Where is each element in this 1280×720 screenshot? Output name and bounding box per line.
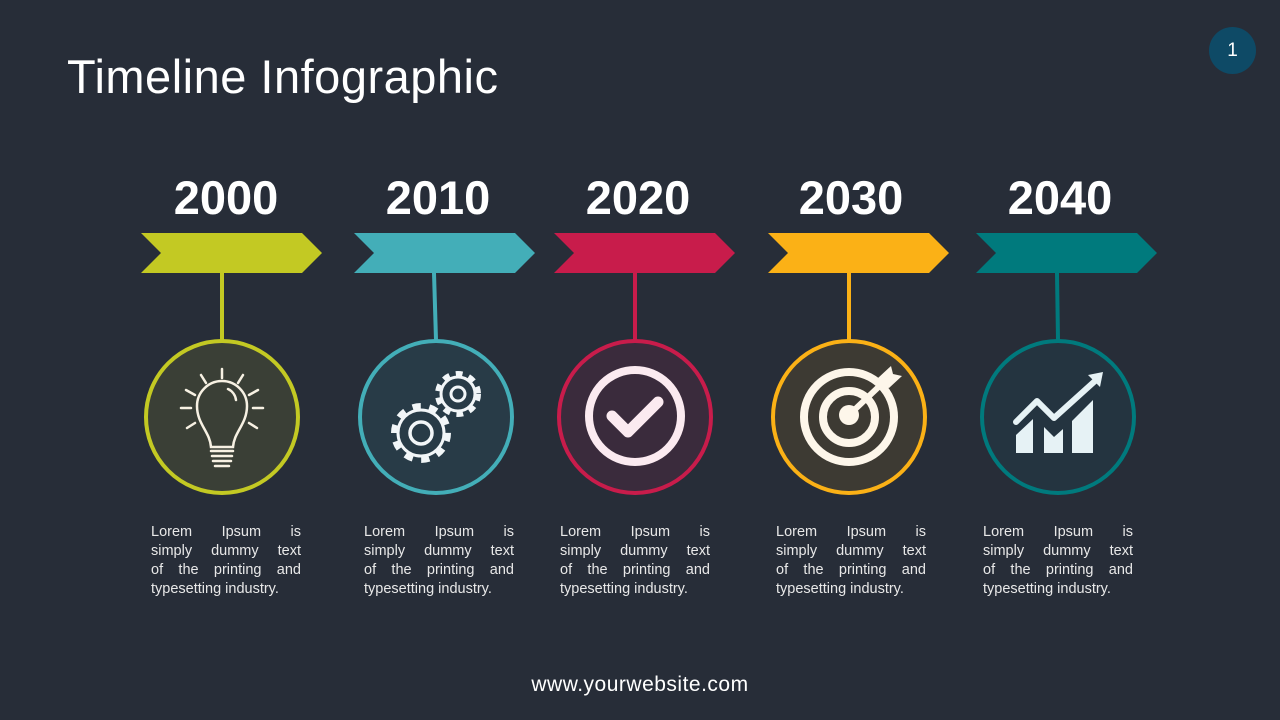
year 2000: 2000 [174, 171, 278, 224]
year 2030: 2030 [799, 171, 903, 224]
text 2010: of the printing and [364, 562, 514, 578]
text 2010: typesetting industry. [364, 581, 492, 597]
text 2000: Lorem Ipsum is [151, 524, 301, 540]
text 2020 [560, 524, 710, 597]
year 2010: 2010 [386, 171, 490, 224]
page number badge [1209, 27, 1256, 74]
footer website: www.yourwebsite.com [531, 673, 749, 696]
title: Timeline Infographic [67, 50, 498, 103]
text 2030 [776, 524, 926, 597]
text 2040: simply dummy text [983, 543, 1133, 559]
text 2000: simply dummy text [151, 543, 301, 559]
text 2010 [364, 524, 514, 597]
page number badge: 1 [1227, 40, 1238, 61]
text 2020: typesetting industry. [560, 581, 688, 597]
text 2000: of the printing and [151, 562, 301, 578]
text 2030: Lorem Ipsum is [776, 524, 926, 540]
text 2000: typesetting industry. [151, 581, 279, 597]
text 2020: Lorem Ipsum is [560, 524, 710, 540]
text 2040 [983, 524, 1133, 597]
text 2010: simply dummy text [364, 543, 514, 559]
text 2030: simply dummy text [776, 543, 926, 559]
year 2020: 2020 [586, 171, 690, 224]
text 2020: simply dummy text [560, 543, 710, 559]
text 2040: of the printing and [983, 562, 1133, 578]
year 2040: 2040 [1008, 171, 1112, 224]
text 2030: typesetting industry. [776, 581, 904, 597]
text 2010: Lorem Ipsum is [364, 524, 514, 540]
text 2000 [151, 524, 301, 597]
text 2030: of the printing and [776, 562, 926, 578]
text 2020: of the printing and [560, 562, 710, 578]
text 2040: typesetting industry. [983, 581, 1111, 597]
text 2040: Lorem Ipsum is [983, 524, 1133, 540]
